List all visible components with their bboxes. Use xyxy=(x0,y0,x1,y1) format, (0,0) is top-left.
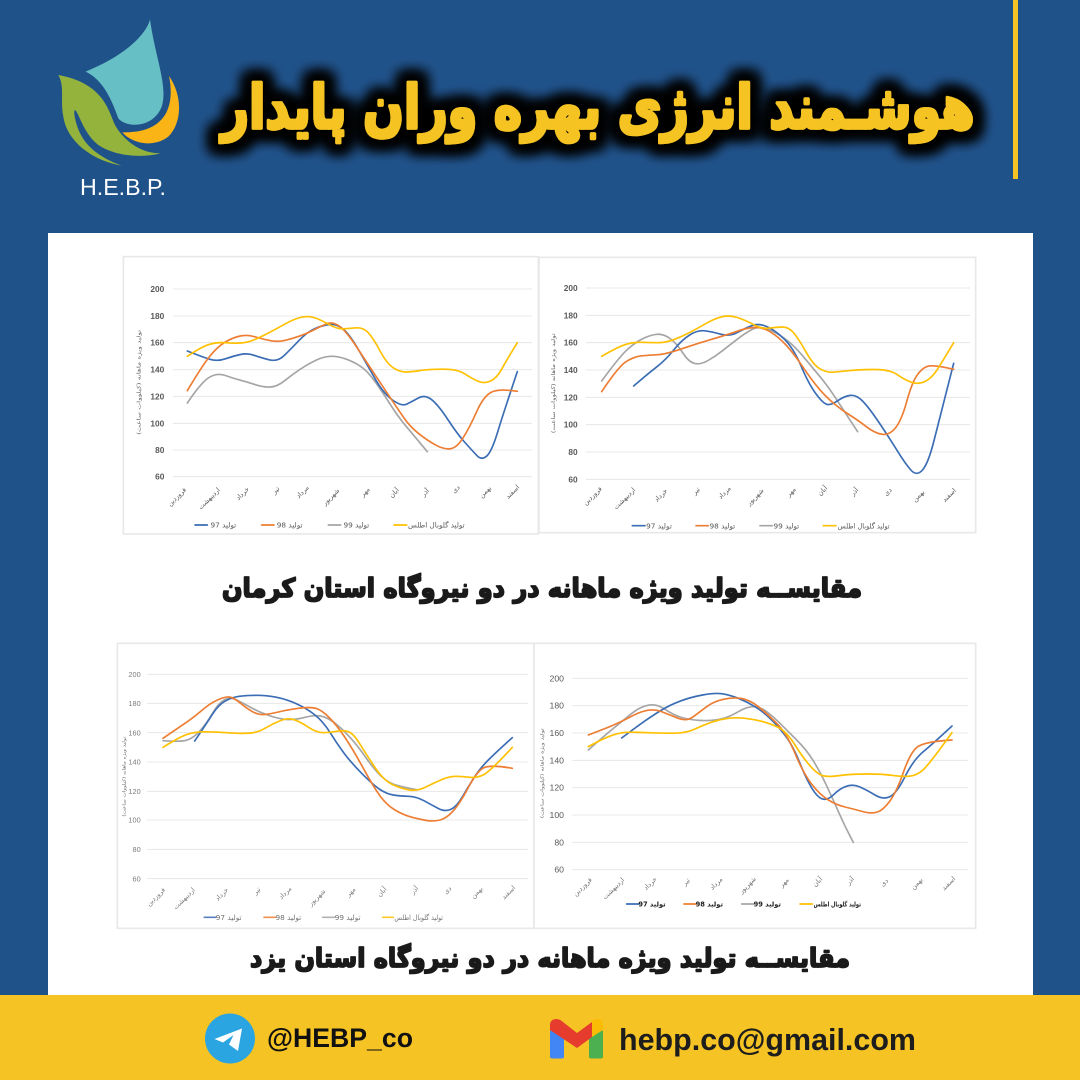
month labels: خرداد xyxy=(234,485,251,502)
month labels: آذر xyxy=(408,883,421,897)
legend: تولید گلوبال اطلس xyxy=(814,900,861,909)
subtitle: Yazd: مقایســه تولید ویژه ماهانه در دو نیروگاه استان یزد xyxy=(250,943,850,974)
month labels: بهمن xyxy=(478,484,493,500)
y axis numbers: 200 xyxy=(128,670,141,679)
series: global atlas xyxy=(163,719,512,790)
month labels: دی xyxy=(882,486,894,498)
legend xyxy=(204,913,443,922)
y axis numbers: 140 xyxy=(128,758,141,767)
y axis numbers xyxy=(150,284,165,482)
legend xyxy=(195,521,465,530)
month labels: آذر xyxy=(848,485,861,498)
chart: Yazd plant 1 xyxy=(117,643,534,928)
y axis numbers: 100 xyxy=(150,418,165,428)
month labels: مهر xyxy=(358,485,372,499)
y axis numbers: 180 xyxy=(550,701,564,711)
y axis numbers: 140 xyxy=(564,365,578,375)
month labels: خرداد xyxy=(642,875,659,892)
chart: Kerman plant 2 xyxy=(539,257,976,533)
icon: leaf xyxy=(58,75,161,166)
month labels: تیر xyxy=(251,885,263,897)
month labels: آذر xyxy=(843,874,857,887)
legend: تولید 98 xyxy=(709,521,735,530)
y axis numbers: 60 xyxy=(155,472,165,482)
month labels xyxy=(582,483,958,511)
y axis numbers: 120 xyxy=(550,783,564,793)
month labels: اردیبهشت xyxy=(172,886,197,911)
y axis numbers: 120 xyxy=(128,787,141,796)
y axis numbers: 80 xyxy=(568,447,578,457)
y axis numbers: 140 xyxy=(550,755,564,765)
month labels: بهمن xyxy=(911,488,926,504)
icon: gmail xyxy=(550,1019,603,1058)
month labels: شهریور xyxy=(306,887,327,908)
series: production 98 xyxy=(163,697,512,821)
month labels: دی xyxy=(450,484,462,495)
icon: water drop xyxy=(86,19,163,125)
month labels xyxy=(145,883,517,911)
y axis numbers: 200 xyxy=(550,673,564,683)
month labels: مرداد xyxy=(294,483,311,500)
month labels: اسفند xyxy=(500,884,517,901)
telegram handle: @HEBP_co xyxy=(267,1023,413,1053)
logo xyxy=(58,19,179,166)
y axis title: تولید ویژه ماهانه (کیلووات ساعت) xyxy=(136,329,143,435)
month labels: دی xyxy=(442,885,453,896)
month labels: بهمن xyxy=(909,876,925,891)
chart: Yazd plant 2 xyxy=(534,643,976,928)
month labels: آذر xyxy=(418,485,432,499)
legend: تولید 97 xyxy=(216,913,242,922)
month labels: اسفند xyxy=(940,875,957,892)
series: production 97 xyxy=(195,695,512,810)
y axis numbers: 160 xyxy=(150,338,165,348)
legend: تولید 99 xyxy=(335,913,361,922)
y axis numbers xyxy=(128,670,141,883)
icon: crescent xyxy=(122,76,179,143)
month labels: خرداد xyxy=(214,886,230,903)
month labels: اردیبهشت xyxy=(601,876,626,901)
month labels: مهر xyxy=(784,485,798,499)
series: production 97 xyxy=(622,693,952,799)
series: production 99 xyxy=(602,328,858,432)
series: global atlas xyxy=(588,718,952,776)
legend: تولید 99 xyxy=(773,521,799,530)
month labels xyxy=(166,483,521,511)
month labels: اسفند xyxy=(941,487,958,504)
legend: تولید گلوبال اطلس xyxy=(838,521,890,530)
month labels: اسفند xyxy=(504,483,521,501)
legend xyxy=(627,900,861,909)
chart: Kerman plant 1 xyxy=(123,257,538,534)
month labels: آبان xyxy=(375,884,389,899)
series: production 99 xyxy=(588,705,853,842)
month labels: آبان xyxy=(815,483,830,498)
series: production 97 xyxy=(187,324,517,458)
y axis numbers: 80 xyxy=(155,445,165,455)
subtitle: Kerman: مقایســه تولید ویژه ماهانه در دو نیروگاه استان کرمان xyxy=(222,573,862,604)
month labels: مهر xyxy=(344,885,358,899)
y axis numbers: 140 xyxy=(150,365,165,375)
legend: تولید 99 xyxy=(343,521,369,530)
series: production 98 xyxy=(602,327,954,434)
y axis numbers: 60 xyxy=(133,874,141,883)
month labels: شهریور xyxy=(744,486,766,508)
legend: تولید 97 xyxy=(210,521,236,530)
y axis numbers: 120 xyxy=(564,392,578,402)
series: production 99 xyxy=(163,698,417,790)
month labels: آبان xyxy=(387,485,402,500)
panel: white content xyxy=(48,233,1033,995)
legend: تولید 99 xyxy=(754,901,781,909)
y axis numbers: 120 xyxy=(150,391,165,401)
y axis numbers: 100 xyxy=(550,810,564,820)
footer band xyxy=(0,995,1080,1080)
legend: تولید 98 xyxy=(696,901,723,909)
series: global atlas xyxy=(602,316,954,383)
month labels: اردیبهشت xyxy=(197,486,222,511)
email address: hebp.co@gmail.com xyxy=(619,1022,916,1057)
month labels: فروردین xyxy=(166,486,188,508)
month labels: مهر xyxy=(777,876,791,890)
legend xyxy=(632,521,890,530)
legend: تولید 98 xyxy=(277,521,303,530)
month labels: فروردین xyxy=(145,886,167,908)
y axis numbers: 200 xyxy=(150,284,165,294)
month labels: بهمن xyxy=(469,885,485,900)
y axis numbers xyxy=(564,283,578,484)
y axis numbers: 180 xyxy=(150,311,165,321)
month labels: تیر xyxy=(690,485,702,497)
month labels: تیر xyxy=(270,485,282,496)
y axis numbers: 60 xyxy=(554,865,564,875)
logo wordmark: H.E.B.P. xyxy=(80,174,166,200)
month labels: شهریور xyxy=(737,875,758,896)
y axis numbers: 60 xyxy=(568,474,578,484)
legend: تولید گلوبال اطلس xyxy=(408,521,465,530)
series: global atlas xyxy=(187,317,517,383)
y axis numbers: 180 xyxy=(128,699,141,708)
month labels: شهریور xyxy=(320,486,341,508)
legend: تولید 98 xyxy=(275,913,301,922)
series: production 98 xyxy=(588,698,952,813)
y axis numbers: 100 xyxy=(128,816,141,825)
y axis numbers: 200 xyxy=(564,283,578,293)
y axis numbers: 160 xyxy=(564,338,578,348)
series: production 98 xyxy=(187,323,517,449)
y axis title: تولید ویژه ماهانه (کیلووات ساعت) xyxy=(122,736,128,817)
y axis numbers: 160 xyxy=(550,728,564,738)
legend: تولید 97 xyxy=(646,521,672,530)
series: production 97 xyxy=(634,325,954,473)
month labels: مرداد xyxy=(716,484,733,501)
legend: تولید گلوبال اطلس xyxy=(394,913,443,922)
y axis title: تولید ویژه ماهانه (کیلووات ساعت) xyxy=(539,727,545,818)
month labels: دی xyxy=(879,877,890,888)
y axis numbers xyxy=(550,673,564,875)
legend: تولید 97 xyxy=(638,901,666,909)
y axis numbers: 160 xyxy=(128,728,141,737)
month labels: فروردین xyxy=(572,876,594,898)
month labels: فروردین xyxy=(582,485,604,507)
month labels: مرداد xyxy=(277,884,294,901)
y axis numbers: 80 xyxy=(133,845,141,854)
month labels: اردیبهشت xyxy=(612,486,637,511)
series: production 99 xyxy=(187,356,427,452)
month labels: خرداد xyxy=(653,487,669,504)
month labels: آبان xyxy=(810,874,825,889)
icon: telegram xyxy=(205,1014,255,1064)
y axis numbers: 180 xyxy=(564,310,578,320)
y axis title: تولید ویژه ماهانه (کیلووات ساعت) xyxy=(550,333,557,433)
month labels xyxy=(572,874,957,901)
y axis numbers: 100 xyxy=(564,420,578,430)
month labels: مرداد xyxy=(708,875,725,892)
header accent bar xyxy=(1013,0,1018,179)
y axis numbers: 80 xyxy=(554,837,564,847)
month labels: تیر xyxy=(680,876,692,888)
